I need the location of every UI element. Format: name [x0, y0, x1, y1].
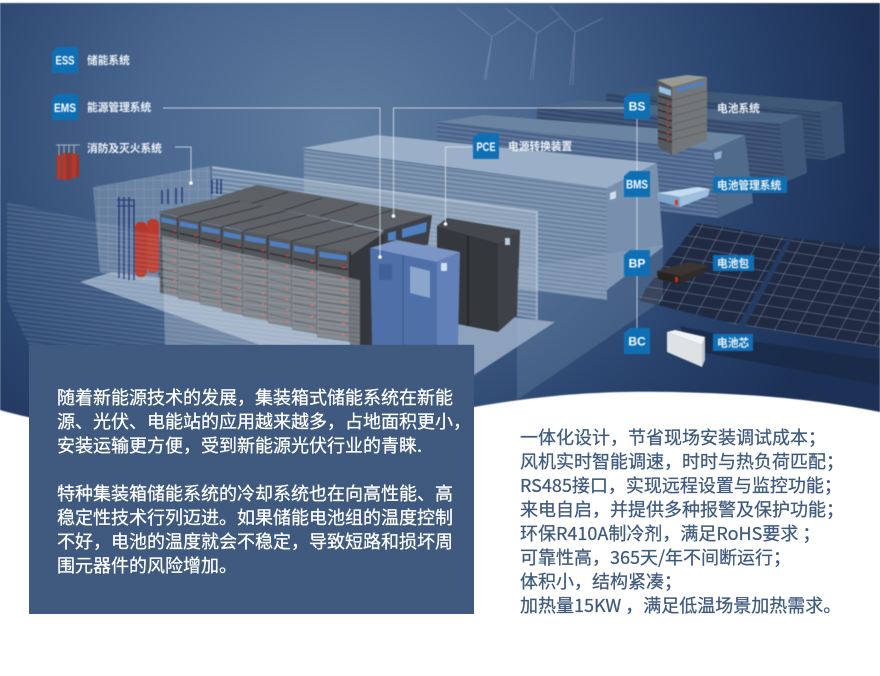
- container 2: [437, 115, 753, 218]
- badge: BC: [624, 328, 650, 354]
- icon: battery system rack: [657, 75, 707, 155]
- badge: BMS: [624, 171, 650, 197]
- label: BMS: [713, 177, 787, 193]
- icon: fire extinguisher cylinders: [56, 145, 80, 180]
- text block: feature list: 环保R410A制冷剂，满足RoHS要求 ；: [520, 520, 820, 546]
- label: battery pack: [713, 255, 754, 271]
- container 1: [302, 135, 663, 300]
- badge: BP: BP: [629, 256, 645, 270]
- text block: feature list: 加热量15KW ，满足低温场景加热需求。: [520, 592, 841, 618]
- label: battery system: 电池系统: [717, 102, 760, 115]
- container 4 far back: [606, 87, 845, 160]
- text block: cooling system: 稳定性技术行列迈进。如果储能电池组的温度控制: [57, 504, 453, 530]
- text block: new energy intro: [57, 384, 471, 458]
- text block: cooling system: 围元器件的风险增加。: [57, 552, 237, 578]
- legend: ESS: 储能系统: [87, 54, 130, 67]
- badge: PCE: PCE: [476, 140, 496, 154]
- icon: battery cell: [667, 330, 705, 367]
- text block: new energy intro: 源、光伏、电能站的应用越来越多，占地面积更小，: [57, 408, 471, 434]
- badge: BC: BC: [628, 334, 646, 348]
- text block: feature list: 可靠性高，365天/年不间断运行；: [520, 544, 791, 570]
- text block: feature list: 体积小，结构紧凑；: [520, 568, 682, 594]
- badge: BMS: BMS: [626, 178, 648, 192]
- fire suppression pipes and cylinders: [117, 179, 221, 280]
- right translucent fence: [517, 245, 663, 400]
- text block: new energy intro: 安装运输更方便，受到新能源光伏行业的青睐.: [57, 432, 422, 458]
- container 3: [537, 100, 807, 182]
- badge: BS: BS: [629, 100, 645, 114]
- legend: ESS: [52, 47, 130, 73]
- text block: feature list: 一体化设计，节省现场安装调试成本；: [520, 424, 826, 450]
- badge: BS: [624, 93, 650, 119]
- blue EMS cabinet: [370, 240, 460, 345]
- black power conversion cabinet: [437, 218, 520, 332]
- leader line: fire system: [175, 147, 193, 185]
- text block: new energy intro: 随着新能源技术的发展，集装箱式储能系统在新能: [57, 384, 453, 410]
- leader line: EMS: [163, 108, 382, 259]
- back fence wall: [212, 167, 537, 320]
- text block: cooling system: 不好，电池的温度就会不稳定，导致短路和损坏周: [57, 528, 453, 554]
- legend: EMS: [52, 94, 151, 120]
- badge: BP: [624, 250, 650, 276]
- legend: EMS: EMS: [54, 101, 76, 115]
- panel: intro text background: [29, 345, 474, 614]
- text block: feature list: 风机实时智能调速，时时与热负荷匹配；: [520, 448, 844, 474]
- front battery rack tops: [158, 197, 385, 256]
- legend: ESS: ESS: [56, 54, 74, 68]
- legend: EMS: 能源管理系统: [87, 101, 151, 114]
- solar panel arrays: [637, 223, 880, 385]
- text block: cooling system: [57, 480, 453, 578]
- text block: cooling system: 特种集装箱储能系统的冷却系统也在向高性能、高: [57, 480, 453, 506]
- legend: fire system label: 消防及灭火系统: [87, 142, 162, 155]
- icon: battery pack: [657, 262, 708, 284]
- badge: PCE: [473, 133, 572, 159]
- text block: feature list: RS485接口，实现远程设置与监控功能；: [520, 472, 842, 498]
- white curved section: [0, 392, 880, 676]
- front translucent fence: [7, 202, 360, 345]
- badge: PCE: 电源转换装置: [508, 140, 572, 153]
- text block: feature list: 来电自启，并提供多种报警及保护功能；: [520, 496, 844, 522]
- wind turbines: [457, 6, 603, 85]
- back battery row: [217, 185, 432, 245]
- icon: BMS module: [657, 187, 710, 207]
- leader line: PCE: [444, 147, 472, 226]
- text block: feature list: [520, 424, 844, 618]
- leader line: to BS: [392, 108, 624, 218]
- label: battery cell: [713, 334, 753, 351]
- label: BMS: 电池管理系统: [717, 179, 781, 192]
- label: battery pack: 电池包: [717, 257, 749, 270]
- front battery racks: [160, 213, 385, 345]
- background gradient: [0, 3, 880, 443]
- left fence wall: [93, 166, 212, 285]
- floor platform: [80, 272, 555, 375]
- battery hierarchy connector: [636, 119, 638, 328]
- label: battery cell: 电池芯: [717, 336, 749, 350]
